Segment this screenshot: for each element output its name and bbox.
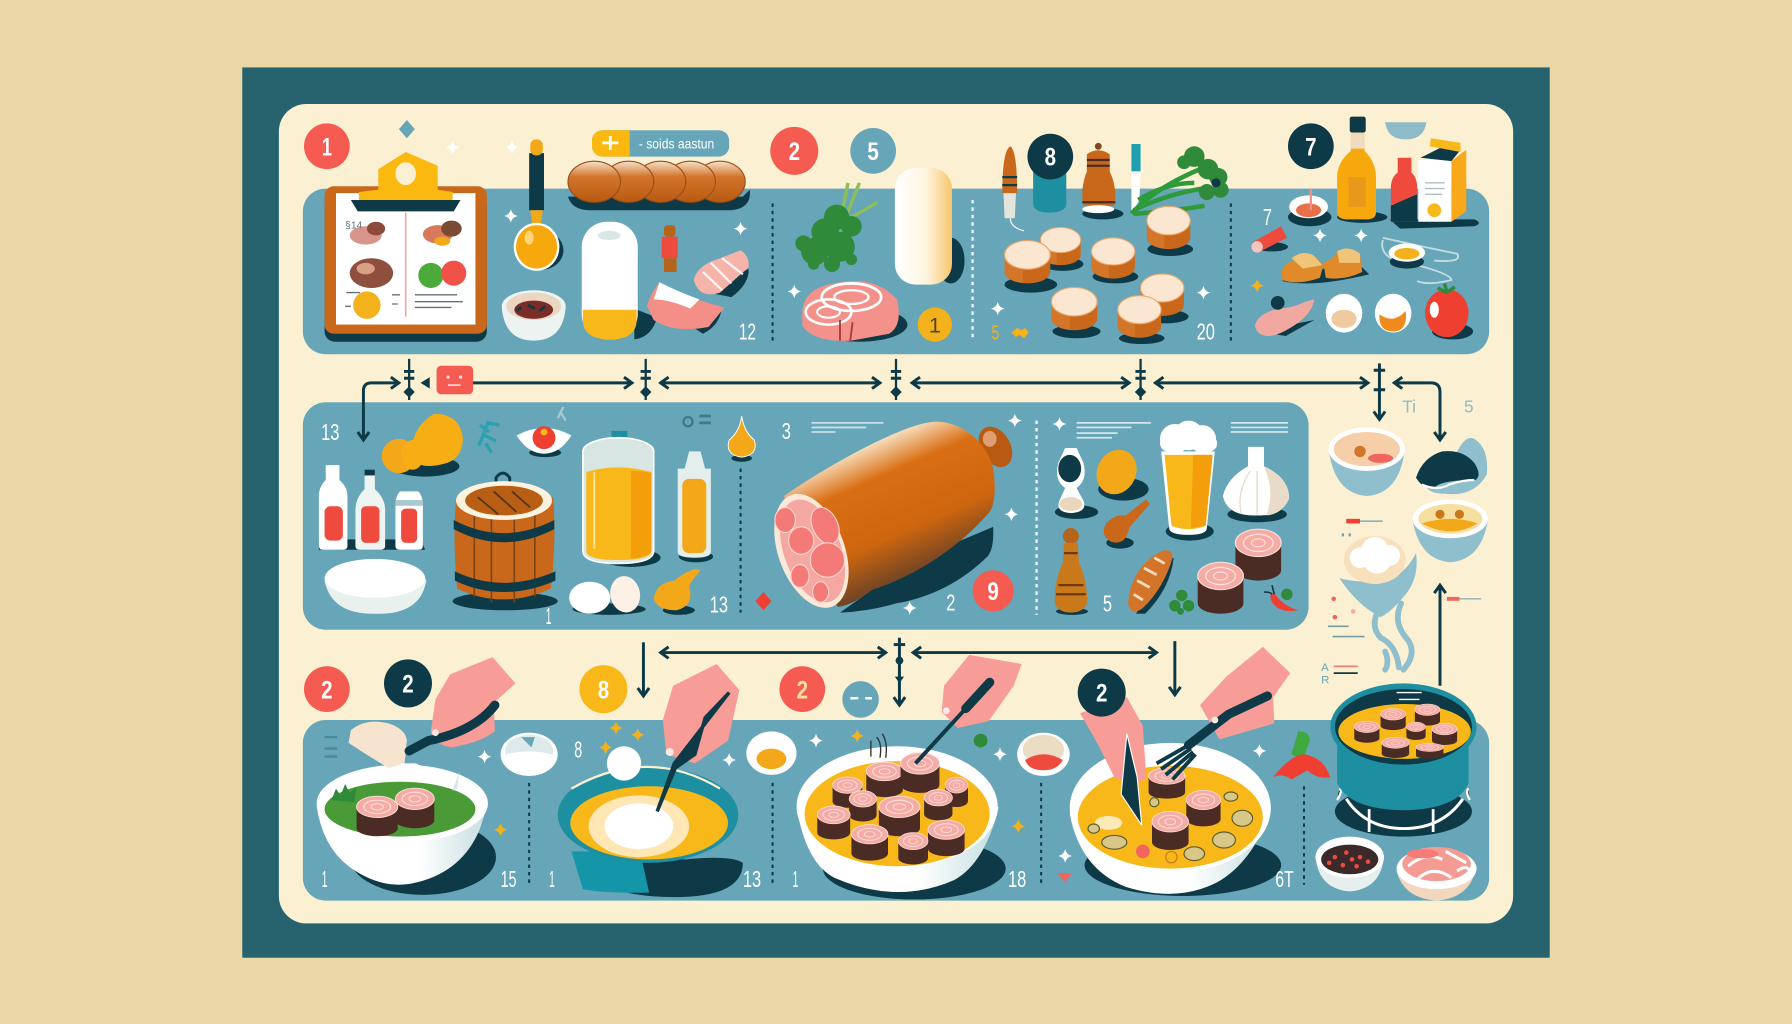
- badge 9: 9: [987, 578, 999, 606]
- egg dish with swirl: [1382, 238, 1458, 283]
- divider white: [972, 200, 974, 341]
- left hand with knife: [1080, 697, 1146, 825]
- step 3 group: [991, 134, 1229, 344]
- number 13: 13: [321, 419, 339, 445]
- numbers: 1: [546, 603, 551, 629]
- numbers: 13: [710, 592, 728, 618]
- eggs: [1326, 294, 1411, 333]
- labels and sparkle: 15: [501, 866, 517, 892]
- yellow flakes: [599, 721, 645, 754]
- badge 2: 2: [789, 138, 800, 166]
- tall tube: [678, 451, 713, 562]
- divider white: [1036, 421, 1038, 615]
- divider: [1040, 783, 1042, 887]
- badge 5: 5: [867, 138, 879, 166]
- paper towel roll: [582, 222, 657, 339]
- yellow badge 1: [918, 307, 952, 342]
- chili pepper: [1273, 731, 1330, 779]
- number 5: 5: [1103, 590, 1112, 616]
- badge 1: 1: [322, 133, 332, 161]
- sparkles row 1: [446, 141, 1210, 315]
- yellow soup bowl: [1070, 743, 1281, 896]
- big bowl of rolls: [797, 734, 1006, 899]
- chili line marks: [1342, 521, 1383, 535]
- yellow badge 1: 1: [929, 313, 941, 338]
- numbers: [546, 418, 791, 629]
- soup bowl 2: [1413, 499, 1488, 562]
- bread loaf: [568, 161, 750, 210]
- panel: row 1 band: [303, 189, 1489, 354]
- step 2 group: [770, 127, 965, 342]
- pepper mill: [1055, 528, 1088, 615]
- row 2 right items: [1053, 417, 1298, 616]
- row 1 step 1 group: [304, 120, 487, 342]
- beer glass: [1160, 421, 1217, 541]
- blue half bowl: [1385, 122, 1426, 139]
- sausage rolls: [1198, 529, 1281, 614]
- tag: sauce label: [592, 130, 729, 157]
- cooking pot on burner: [1330, 683, 1477, 837]
- labels and marks: 6T: [1275, 866, 1294, 892]
- badge 9: [973, 570, 1014, 611]
- right hand with fork: [1157, 647, 1290, 779]
- divider: [1230, 203, 1232, 341]
- badge 8: [1027, 134, 1073, 179]
- meat piece: [1255, 296, 1314, 336]
- connector arrows row 2: [643, 638, 1175, 705]
- yellow bowl small: [746, 731, 797, 775]
- teal sprig: [479, 423, 499, 453]
- divider: [1303, 786, 1305, 885]
- number 2 and sparkles: [903, 414, 1022, 615]
- eggs: [569, 574, 646, 615]
- up arrow: [1439, 585, 1441, 686]
- hand with knife: [657, 664, 739, 811]
- yellow star: [1250, 279, 1264, 293]
- number 7: 7: [1263, 204, 1272, 230]
- badge navy 2: 2: [1096, 680, 1107, 708]
- spice bowl small: [502, 290, 566, 341]
- soup bowl 1: [1329, 427, 1405, 496]
- small 5 and star: [991, 321, 1029, 344]
- small labels: Ti: [1402, 397, 1416, 417]
- pouring pitcher and hand: [349, 657, 515, 768]
- small labels A R: [1321, 662, 1358, 686]
- labels and marks: [793, 729, 1026, 892]
- bowl with greens: [317, 765, 496, 895]
- number 12: 12: [739, 318, 756, 344]
- badge yellow 8: [579, 665, 627, 713]
- divider: [528, 783, 530, 887]
- clipboard recipe: §14: [345, 221, 363, 232]
- yellow potatoes: [382, 414, 463, 477]
- red diamond: [755, 592, 771, 610]
- black ladle object: [1416, 438, 1487, 494]
- number 2 and sparkles: 2: [946, 589, 955, 615]
- badge navy 2: 2: [402, 671, 414, 699]
- cream panel: [279, 104, 1513, 923]
- spice bowl: [1315, 837, 1384, 891]
- badge red 2: 2: [797, 676, 808, 704]
- oil bottle: [1337, 117, 1387, 223]
- knife 2: [1131, 144, 1141, 215]
- divider: [772, 203, 774, 341]
- star and lines: [1053, 417, 1288, 438]
- parsley small: [1169, 590, 1194, 615]
- badge yellow 8: 8: [598, 676, 609, 704]
- red smile tag: [437, 366, 473, 394]
- small labels: 5: [1464, 397, 1474, 417]
- red tick mark: [1447, 597, 1481, 601]
- numbers: 3: [782, 418, 791, 444]
- bottle row: [319, 465, 425, 550]
- meat bowl: [1397, 847, 1477, 901]
- celery greens: [1131, 146, 1229, 214]
- number 20: 20: [1197, 318, 1215, 344]
- row 3 step A: [304, 657, 558, 895]
- small labels A R: A: [1321, 662, 1329, 674]
- labels: 8: [574, 737, 582, 763]
- small labels A R: R: [1321, 674, 1329, 686]
- labels and marks: 18: [1008, 866, 1026, 892]
- row 3 step B: [549, 664, 797, 897]
- labels and marks: [1011, 744, 1294, 892]
- right column: [1321, 397, 1488, 686]
- lines: [811, 423, 883, 432]
- white mixing bowl: [325, 559, 426, 614]
- labels: 13: [743, 866, 761, 892]
- bread chunks: [1281, 248, 1369, 283]
- knife 1: [1002, 146, 1024, 231]
- badge navy 2: [384, 659, 432, 707]
- small legend marks: [683, 416, 711, 426]
- tomato: [1425, 283, 1473, 339]
- yellow egg: [1089, 443, 1149, 501]
- meat pieces: [647, 250, 749, 334]
- panel: row 3 band: [303, 720, 1489, 901]
- garlic: [1223, 447, 1289, 522]
- badge 8: 8: [1045, 144, 1056, 172]
- red chili: [1264, 585, 1298, 611]
- small oil drop: [728, 416, 755, 462]
- dish with spoon: [1288, 189, 1331, 226]
- red bottle and milk carton: [1390, 138, 1479, 229]
- labels and sparkle: [322, 737, 517, 892]
- badge red 2: [779, 666, 825, 712]
- white cylinder: [895, 168, 965, 285]
- bread rounds: [1005, 206, 1193, 344]
- white puff: [607, 746, 641, 781]
- red tube: [1251, 226, 1288, 253]
- badge 7: [1288, 123, 1334, 169]
- rolled meat: [802, 281, 907, 342]
- labels and sparkle: 1: [322, 866, 327, 892]
- labels and marks: 1: [793, 866, 798, 892]
- divider: [740, 469, 742, 613]
- badge 1: [304, 123, 350, 169]
- row 3 step C: [779, 655, 1070, 899]
- clipboard recipe: [325, 152, 487, 342]
- wooden barrel: [453, 473, 558, 610]
- small bowl: [501, 733, 558, 776]
- connector arrows row 1: [363, 359, 1440, 440]
- labels: [549, 737, 761, 892]
- divider: [772, 783, 774, 887]
- small labels: [1402, 397, 1474, 417]
- tomato plate: [517, 407, 571, 457]
- badge navy 2: [1078, 669, 1126, 717]
- small red bowl: [1017, 733, 1070, 776]
- ladle: [514, 139, 563, 271]
- row 2 ingredients: [319, 407, 883, 629]
- panel: row 2 band: [303, 402, 1309, 630]
- diamond marker: [399, 120, 415, 138]
- badge red 2: 2: [321, 676, 333, 704]
- wooden dipper: [1104, 499, 1150, 549]
- baguette: [1128, 550, 1174, 614]
- small 5 and star: 5: [991, 321, 999, 344]
- badge 7: 7: [1305, 133, 1317, 161]
- step 4 group: [1250, 117, 1479, 339]
- yellow spoon: [654, 569, 701, 615]
- sparkles: [1313, 229, 1368, 242]
- teal bowl with rice: [558, 767, 743, 897]
- badge 2: [770, 127, 818, 175]
- tag: sauce label: - soids aastun: [639, 137, 714, 152]
- teal canister: [1033, 171, 1066, 213]
- juice jar: [583, 431, 661, 567]
- badge red 2: [304, 666, 350, 712]
- labels: 1: [549, 866, 555, 892]
- blue badge arrows: [842, 681, 879, 718]
- tiny red dots: [1328, 597, 1365, 637]
- hand with skewer: [915, 655, 1022, 763]
- pepper mill: [1082, 143, 1123, 219]
- small sauce bottle: [662, 225, 678, 272]
- row 3 step D: [1011, 647, 1330, 896]
- teal frame: [242, 67, 1550, 958]
- steam cloud and swirl: [1339, 536, 1417, 670]
- parsley: [795, 183, 878, 272]
- salami: [760, 421, 1019, 618]
- flask: [1055, 448, 1098, 519]
- badge 5: [850, 128, 896, 174]
